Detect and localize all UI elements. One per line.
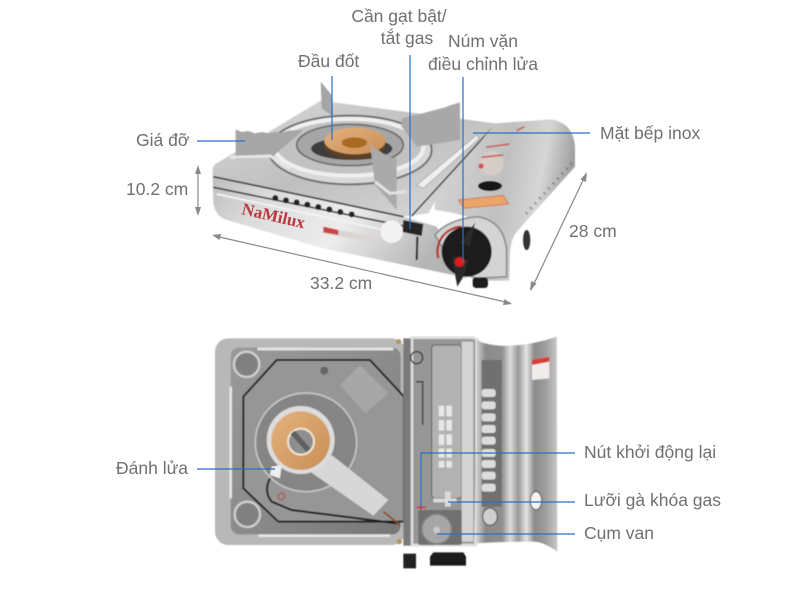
top plate front edge (213, 177, 403, 226)
label: knob: Núm vặn (448, 31, 518, 51)
photo: stove underside, open view (215, 337, 557, 568)
ignition foot (473, 277, 488, 288)
vent holes (272, 195, 355, 217)
stove top plate (213, 101, 495, 217)
right lid flap (476, 337, 557, 552)
label: gas lock: Lưỡi gà khóa gas (584, 490, 721, 510)
reset button mark (417, 507, 426, 510)
label: valve: Cụm van (584, 523, 654, 543)
label: lever: Cần gạt bật/ (351, 6, 447, 26)
dimension arrow: height (195, 165, 201, 216)
stove body front panel (213, 177, 467, 278)
label: depth: 28 cm (569, 221, 617, 241)
burner circle (255, 393, 357, 492)
pan support left (236, 129, 303, 159)
burner venturi tube (310, 455, 388, 516)
dimension arrow: width (212, 234, 512, 305)
flap slots (482, 389, 496, 492)
inner octagonal panel (243, 360, 404, 522)
gas lock tab (433, 492, 457, 507)
knob housing (435, 217, 507, 278)
photo: assembled stove, front view (213, 82, 575, 288)
white sticker glow (380, 220, 403, 243)
label: lever line 2: tắt gas (381, 27, 434, 48)
label: reset button: Nút khởi động lại (584, 442, 716, 462)
label: pan support: Giá đỡ (136, 130, 189, 150)
burner rings (268, 116, 432, 184)
corner feet (234, 352, 260, 527)
vent slots (439, 406, 452, 468)
warning label (532, 357, 549, 380)
black toggle lever (403, 220, 423, 236)
label: knob line 2: điều chỉnh lửa (428, 54, 538, 74)
lid markings (458, 127, 524, 208)
label: igniter: Đánh lửa (116, 458, 188, 478)
middle valve bay (412, 338, 475, 546)
igniter (270, 465, 282, 478)
valve assembly (418, 510, 462, 545)
label: burner head: Đầu đốt (298, 51, 359, 71)
knob seen from below (430, 552, 466, 566)
brand logo: NaMilux (240, 199, 307, 232)
right side lid with case (435, 119, 575, 281)
pan support front (370, 143, 397, 210)
pan support back (321, 82, 333, 117)
red arc scale (437, 227, 462, 258)
brass burner head (324, 128, 386, 159)
control knob (442, 223, 492, 287)
centre bar (403, 338, 412, 546)
leader lines (197, 55, 590, 534)
dimension arrow: depth (530, 172, 587, 291)
brass burner ring (271, 411, 330, 470)
label: stainless top: Mặt bếp inox (600, 123, 700, 143)
bottom tray (215, 338, 405, 545)
label: height: 10.2 cm (126, 179, 188, 199)
label: width: 33.2 cm (310, 273, 372, 293)
flap holes (483, 508, 497, 525)
